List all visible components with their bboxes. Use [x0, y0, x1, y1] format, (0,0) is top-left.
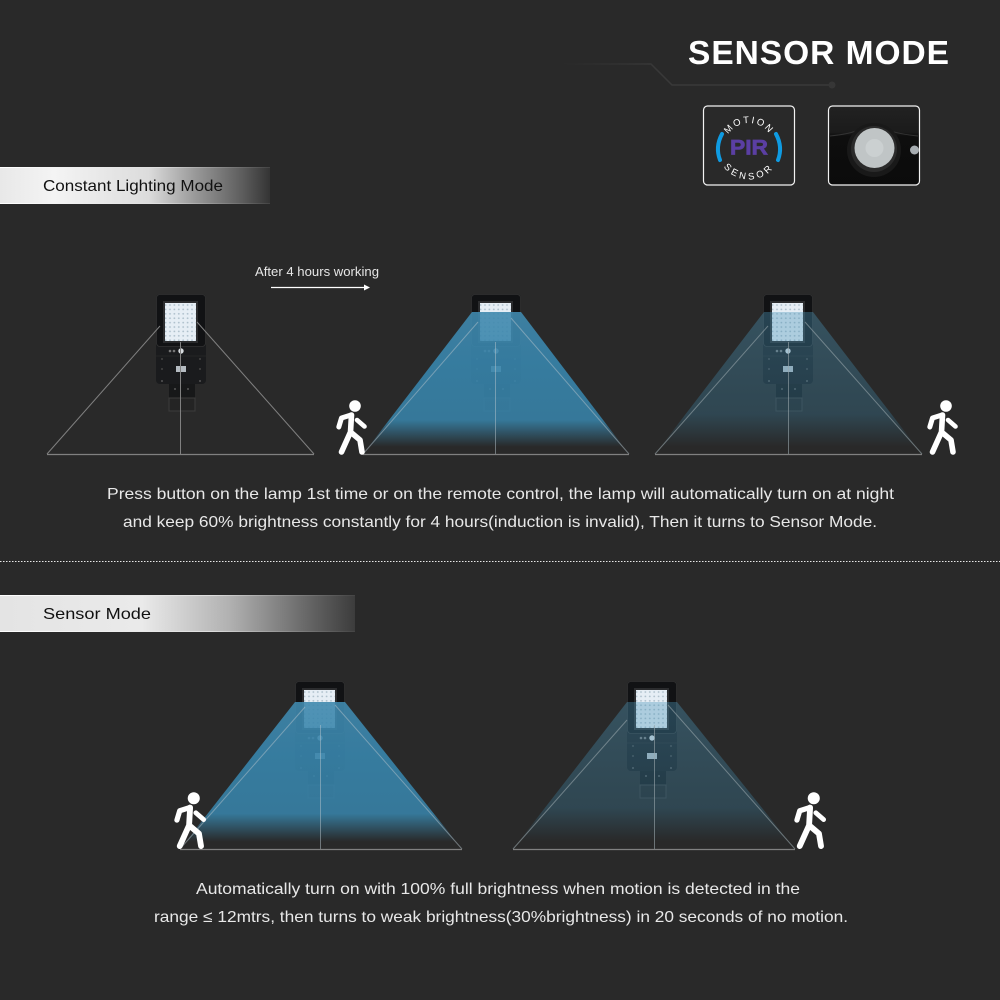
icon: PIR motion sensor badge: [702, 105, 796, 186]
diagram: sensor mode dim beam, person right: [513, 681, 824, 850]
description: constant lighting mode: and keep 60% brightness constantly for 4 hours(induction is invalid), Then it turns to Sensor Mode.: [123, 514, 877, 531]
description: sensor mode: [154, 881, 848, 926]
icon: PIR motion sensor badge: MOTION: [724, 116, 774, 134]
icon: walking person: [177, 792, 204, 846]
description: constant lighting mode: [107, 486, 895, 531]
label: after 4 hours working: After 4 hours working: [255, 265, 379, 279]
icon: sensor photo: [828, 106, 920, 185]
description: sensor mode: Automatically turn on with 100% full brightness when motion is detected in the: [196, 881, 800, 898]
title: SENSOR MODE: [688, 35, 949, 72]
diagram: lamp with bright beam, person detected left: [339, 294, 629, 454]
icon: PIR motion sensor badge: PIR: [730, 136, 768, 160]
section header: Constant Lighting Mode: [0, 167, 270, 204]
diagram: lamp with dim beam, person right: [655, 294, 956, 454]
arrow: [271, 284, 370, 290]
section header: Constant Lighting Mode: Constant Lighting Mode: [43, 178, 223, 195]
description: sensor mode: range ≤ 12mtrs, then turns to weak brightness(30%brightness) in 20 seconds of no motion.: [154, 909, 848, 926]
decorative circuit trace: [560, 64, 836, 88]
diagram: sensor mode bright beam, person left: [177, 681, 462, 850]
description: constant lighting mode: Press button on the lamp 1st time or on the remote control, the lamp will automatically turn on at night: [107, 486, 895, 503]
icon: walking person: [339, 400, 364, 452]
icon: PIR motion sensor badge: SENSOR: [724, 164, 772, 180]
icon: walking person: [797, 792, 824, 846]
section header: Sensor Mode: [0, 595, 355, 632]
icon: walking person: [930, 400, 956, 452]
diagram: lamp on with no beam: [47, 294, 314, 454]
section header: Sensor Mode: Sensor Mode: [43, 606, 151, 623]
